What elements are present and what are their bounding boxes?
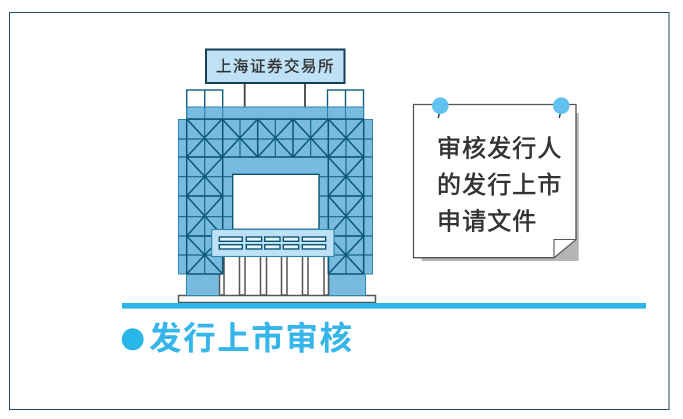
upper towers: [187, 90, 364, 119]
entrance columns: [220, 256, 328, 295]
note text: [437, 136, 562, 236]
illustration: stock exchange building: [178, 50, 376, 302]
note text: 申请文件: [437, 208, 537, 236]
exchange sign: 上海证券交易所: [216, 58, 335, 76]
bullet: [122, 328, 144, 350]
pin left: [432, 97, 449, 118]
lower pillars: [186, 274, 366, 296]
note sheet: [414, 104, 576, 258]
thin grid lines: [178, 119, 372, 274]
entrance canopy: [212, 230, 334, 256]
window: [233, 174, 319, 229]
exchange sign: [206, 50, 344, 83]
sign posts: [245, 83, 305, 108]
section title: 发行上市审核: [149, 320, 354, 356]
sticky note: [414, 97, 579, 261]
roof band: [187, 107, 364, 120]
building body: [178, 120, 372, 274]
folded corner: [554, 240, 576, 258]
note text: 审核发行人: [437, 136, 562, 162]
note text: 的发行上市: [437, 172, 562, 199]
truss lines: [187, 119, 364, 274]
ground line: [122, 303, 646, 309]
base slab: [178, 296, 376, 302]
pin right: [553, 97, 570, 118]
note shadow: [422, 113, 579, 261]
